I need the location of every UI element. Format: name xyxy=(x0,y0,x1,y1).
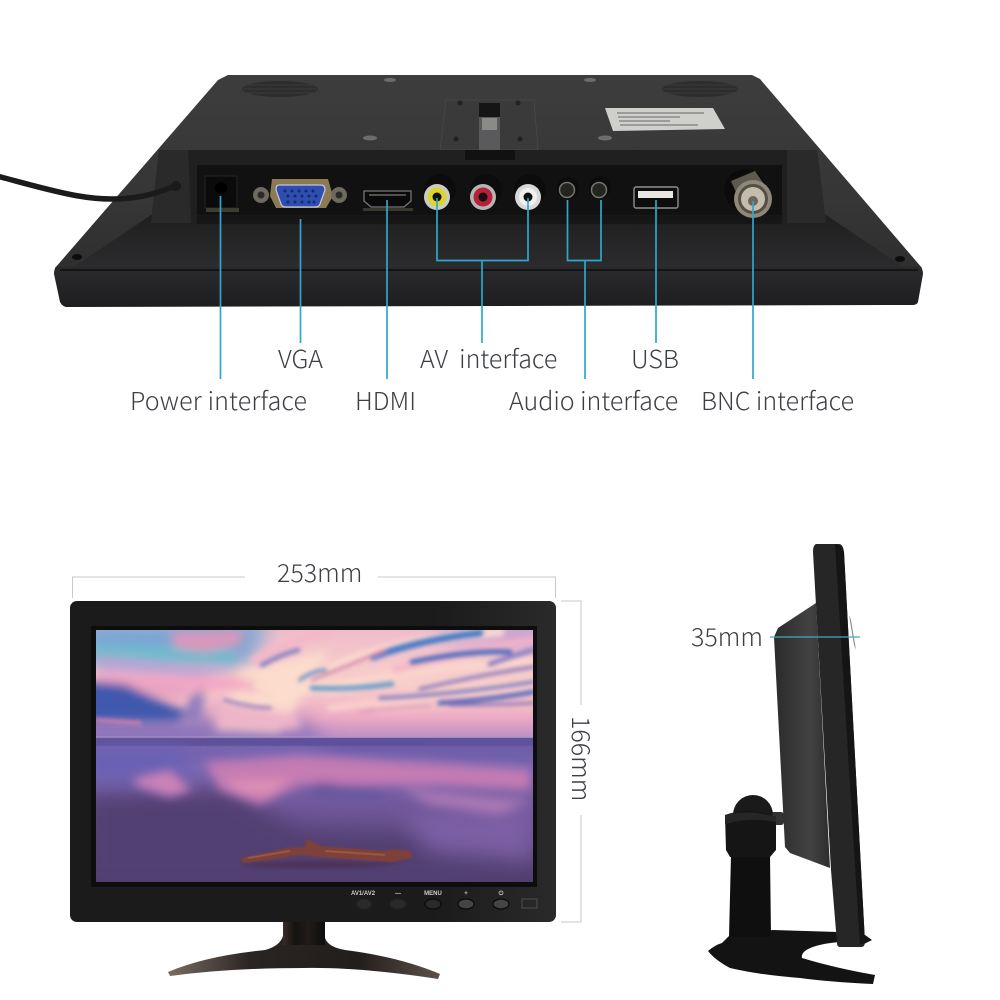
monitor side panel xyxy=(813,544,865,947)
monitor stand xyxy=(168,921,440,979)
power jack xyxy=(205,176,239,212)
BNC connector xyxy=(724,169,772,218)
bezel buttons xyxy=(351,890,537,909)
speaker grille right xyxy=(662,81,738,97)
port labels xyxy=(130,340,854,418)
height dimension: 166mm xyxy=(564,716,600,801)
height dimension xyxy=(561,601,600,922)
port labels: HDMI xyxy=(355,382,416,418)
hinge pin xyxy=(770,812,784,825)
driftwood xyxy=(241,838,412,869)
rating label xyxy=(605,108,725,131)
side stand base xyxy=(708,930,875,984)
depth label: 35mm xyxy=(691,618,763,654)
VGA port xyxy=(253,179,347,208)
front bezel lip xyxy=(54,266,923,307)
HDMI port xyxy=(363,191,413,211)
monitor bezel xyxy=(70,601,556,922)
side view of monitor xyxy=(691,544,875,984)
screws xyxy=(363,78,612,140)
port labels: Power interface xyxy=(130,382,307,418)
surface below housing xyxy=(72,215,905,268)
connector housing xyxy=(151,150,826,223)
front view of monitor xyxy=(70,601,556,979)
port labels: USB xyxy=(631,340,679,376)
AV white jack xyxy=(514,174,546,210)
depth dimension line xyxy=(770,636,860,638)
width dimension: 253mm xyxy=(277,554,362,590)
bezel buttons: ⏻ xyxy=(499,890,504,897)
AV red jack xyxy=(470,174,502,210)
port labels: VGA xyxy=(278,340,323,376)
mounting bracket xyxy=(440,100,538,165)
power cable xyxy=(0,176,181,199)
corner screw holes xyxy=(72,254,905,262)
port labels: Audio interface xyxy=(509,382,678,418)
rear view of monitor with ports xyxy=(0,75,923,307)
side stand post xyxy=(729,855,771,937)
bezel buttons: MENU xyxy=(424,891,442,897)
bezel buttons: — xyxy=(395,891,401,897)
port labels: AV interface xyxy=(420,340,557,376)
AV yellow jack xyxy=(424,174,456,210)
monitor rear hump xyxy=(774,603,830,868)
hinge ball and collar xyxy=(725,795,776,857)
bezel buttons: AV1/AV2 xyxy=(351,891,376,897)
width dimension xyxy=(72,554,556,598)
USB port xyxy=(634,187,678,208)
audio jacks xyxy=(557,176,611,199)
back panel xyxy=(55,75,922,300)
port labels: BNC interface xyxy=(701,382,854,418)
callout lines xyxy=(220,196,753,379)
bezel buttons: + xyxy=(464,891,468,897)
speaker grille left xyxy=(242,81,318,97)
screen landscape xyxy=(96,630,533,882)
